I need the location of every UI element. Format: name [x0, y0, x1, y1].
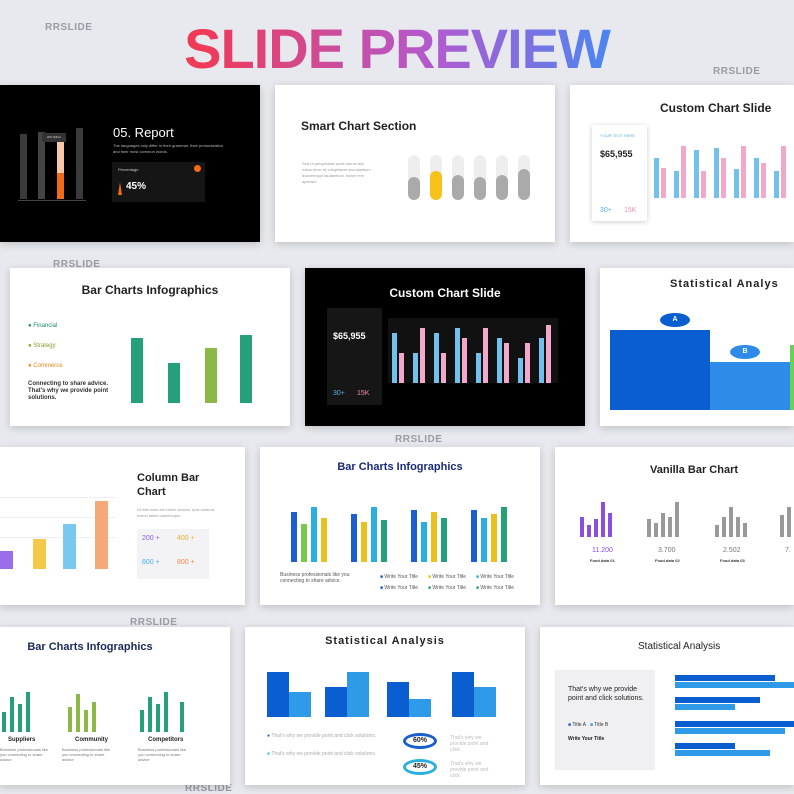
heading: Statistical Analys — [670, 278, 779, 290]
watermark: RRSLIDE — [395, 434, 442, 445]
bar chart — [0, 497, 115, 569]
slide: statistical analysis grouped: That's why we provide point and click. — [450, 761, 488, 779]
labels: Business professionals like you connecting to share advice — [62, 747, 110, 762]
bar chart — [388, 318, 558, 383]
heading: Bar Charts Infographics — [27, 641, 153, 653]
labels: Community — [75, 737, 108, 743]
list: ● Commerce — [28, 363, 63, 369]
slide: custom chart black — [305, 268, 585, 426]
percentage card — [112, 162, 205, 202]
card: YOUR TEXT HERE — [600, 133, 635, 138]
grouped bars — [267, 672, 496, 717]
list: Connecting to share advice. That's why we provide point solutions. — [28, 381, 108, 401]
card: 15K — [357, 390, 369, 397]
horizontal bars — [675, 675, 794, 756]
block chart — [610, 313, 794, 410]
slide: vanilla bar chart — [555, 447, 794, 605]
stats box: 600 + — [142, 559, 160, 566]
card: 30+ — [600, 207, 612, 214]
card — [327, 308, 382, 405]
slide: report — [0, 85, 260, 242]
legend: ■ Write Your Title — [380, 585, 418, 591]
stats box — [137, 529, 209, 579]
watermark: RRSLIDE — [185, 783, 232, 794]
list: ● Financial — [28, 323, 57, 329]
heading: Statistical Analysis — [325, 635, 445, 647]
pill chart — [408, 155, 530, 200]
numbers — [590, 547, 791, 563]
labels: Competitors — [148, 737, 183, 743]
donut 60%: 60% — [413, 737, 427, 744]
grouped bar chart — [291, 507, 507, 562]
card: $65,955 — [600, 149, 633, 159]
slide: custom chart white — [570, 85, 794, 242]
text notes: ● That's why we provide point and click solutions. — [267, 733, 376, 739]
text notes — [267, 733, 376, 757]
donut 45%: 45% — [413, 763, 427, 770]
legend: ■ Write Your Title — [428, 585, 466, 591]
title — [0, 16, 794, 81]
slide: bar charts infographics green — [10, 268, 290, 426]
card — [592, 125, 647, 221]
block chart: A — [672, 316, 678, 323]
bar chart — [18, 128, 86, 201]
donut 60% — [403, 733, 437, 749]
numbers: Food data 01 — [590, 558, 615, 563]
legend: ■ Write Your Title — [380, 574, 418, 580]
numbers: 2.502 — [723, 547, 741, 554]
text box: ■ Title A ■ Title B — [568, 722, 608, 728]
watermark: RRSLIDE — [713, 66, 760, 77]
numbers: 7. — [785, 547, 791, 554]
heading: Custom Chart Slide — [660, 101, 771, 115]
heading: Bar Charts Infographics — [337, 461, 463, 473]
stats box: 400 + — [177, 535, 195, 542]
slide: statistical analysis grouped: That's why we provide point and click. — [450, 735, 488, 753]
heading — [137, 472, 200, 498]
card: 15K — [624, 207, 636, 214]
labels: Suppliers — [8, 737, 35, 743]
percentage card: Percentage — [118, 167, 138, 172]
text box: That's why we provide point and click solutions. — [568, 686, 644, 702]
heading: 05. Report — [113, 125, 174, 140]
legend: Business professionals like you connecting to share advice. — [280, 572, 349, 584]
slide: statistical analysis horizontal — [540, 627, 794, 785]
legend: ■ Write Your Title — [476, 585, 514, 591]
watermark: RRSLIDE — [45, 22, 92, 33]
watermark: RRSLIDE — [130, 617, 177, 628]
numbers: 11.200 — [592, 547, 613, 554]
title: SLIDE PREVIEW — [184, 17, 610, 80]
card: 30+ — [333, 390, 345, 397]
donut 45% — [403, 759, 437, 775]
watermark: RRSLIDE — [53, 259, 100, 270]
heading: Chart — [137, 486, 166, 498]
heading: Statistical Analysis — [638, 641, 720, 652]
slide: statistical analysis grouped — [245, 627, 525, 785]
slide: bar charts infographics grouped — [260, 447, 540, 605]
slide: column bar chart: Ut wisi enim ad minim veniam, quis nostrud exerci tation ullamcorper. — [137, 507, 214, 518]
bar groups — [2, 692, 184, 732]
text box: Write Your Title — [568, 736, 604, 742]
bar chart — [131, 335, 252, 403]
heading: Vanilla Bar Chart — [650, 464, 738, 476]
slide: report: The languages only differ in their grammar, their pronunciation and their most common words. — [113, 143, 223, 154]
slide: smart chart — [275, 85, 555, 242]
heading: Smart Chart Section — [301, 119, 416, 133]
labels — [0, 736, 186, 762]
slide: column bar chart — [0, 447, 245, 605]
heading: Bar Charts Infographics — [82, 283, 218, 297]
list — [28, 322, 108, 401]
stats box: 200 + — [142, 535, 160, 542]
numbers: Food data 02 — [655, 558, 680, 563]
labels: Business professionals like you connecting to share advice — [138, 747, 186, 762]
block chart: B — [742, 348, 748, 355]
legend: ■ Write Your Title — [428, 574, 466, 580]
text notes: ● That's why we provide point and click solutions. — [267, 751, 376, 757]
numbers: 3.700 — [658, 547, 676, 554]
slide: statistical analysis blocks — [600, 268, 794, 426]
mini charts — [580, 502, 791, 537]
slide: bar charts infographics three — [0, 627, 230, 785]
heading: Custom Chart Slide — [389, 286, 501, 300]
labels: Business professionals like you connecting to share advice — [0, 747, 48, 762]
percentage card: 45% — [126, 181, 146, 192]
heading: Column Bar — [137, 472, 199, 484]
card: $65,955 — [333, 331, 366, 341]
numbers: Food data 03 — [720, 558, 745, 563]
legend: ■ Write Your Title — [476, 574, 514, 580]
bar chart: 200 Million — [47, 135, 61, 139]
legend — [280, 572, 514, 591]
stats box: 800 + — [177, 559, 195, 566]
text box — [555, 670, 655, 770]
list: ● Strategy — [28, 343, 56, 349]
bar chart — [654, 146, 786, 198]
slide: smart chart: Sed ut perspiciatis unde omnis iste natus error sit voluptatem accusantium doloremque laudantium, totam rem aperiam. — [302, 161, 371, 184]
